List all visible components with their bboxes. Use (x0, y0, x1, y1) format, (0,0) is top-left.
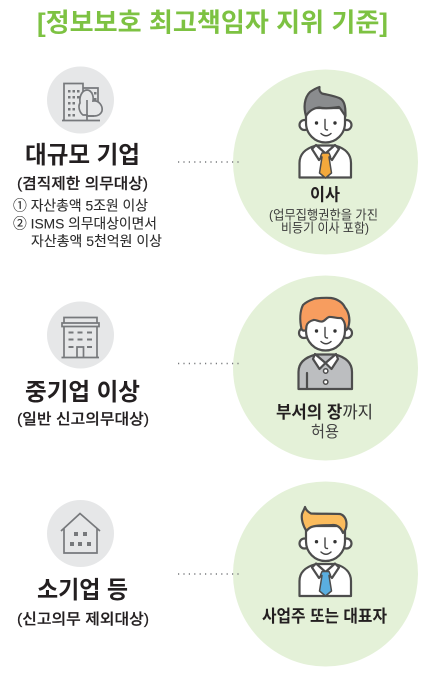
icon: small house (47, 500, 114, 567)
text block: large enterprise criteria: ② ISMS 의무대상이면서 (13, 216, 157, 232)
heading: mid-size enterprise: 중기업 이상 (25, 379, 140, 406)
icon: man with blue tie (300, 507, 352, 596)
panel: department head (233, 276, 418, 460)
dotted connector: mid-size enterprise (178, 362, 242, 364)
panel: small enterprise (17, 500, 149, 628)
panel: large enterprise (13, 66, 162, 249)
text block: large enterprise criteria (13, 198, 162, 249)
label: executive: 이사 (310, 186, 340, 204)
icon: man with orange hair (298, 298, 352, 389)
subheading: small enterprise: (신고의무 제외대상) (17, 611, 149, 628)
label: department head: 부서의 장까지 (276, 403, 373, 422)
title: [정보보호 최고책임자 지위 기준] (37, 8, 388, 38)
panel: executive (233, 70, 418, 254)
panel: mid-size enterprise (17, 302, 149, 428)
dotted connector: large enterprise (178, 161, 242, 163)
icon: office block (47, 302, 114, 368)
icon: office buildings and tree (47, 66, 114, 134)
heading: large enterprise: 대규모 기업 (25, 142, 140, 169)
heading: small enterprise: 소기업 등 (37, 577, 128, 604)
note: executive: 비등기 이사 포함) (281, 220, 369, 236)
panel: business owner (233, 482, 418, 666)
text block: large enterprise criteria: 자산총액 5천억원 이상 (31, 233, 162, 249)
label: allowed: 허용 (311, 423, 339, 441)
subheading: large enterprise: (겸직제한 의무대상) (17, 176, 148, 192)
label: business owner: 사업주 또는 대표자 (262, 607, 387, 626)
subheading: mid-size enterprise: (일반 신고의무대상) (17, 411, 149, 428)
note: executive (269, 208, 378, 236)
text block: large enterprise criteria: ① 자산총액 5조원 이상 (13, 198, 148, 214)
note: executive: (업무집행권한을 가진 (269, 208, 378, 222)
dotted connector: small enterprise (178, 573, 242, 575)
icon: man with orange tie (300, 87, 352, 178)
